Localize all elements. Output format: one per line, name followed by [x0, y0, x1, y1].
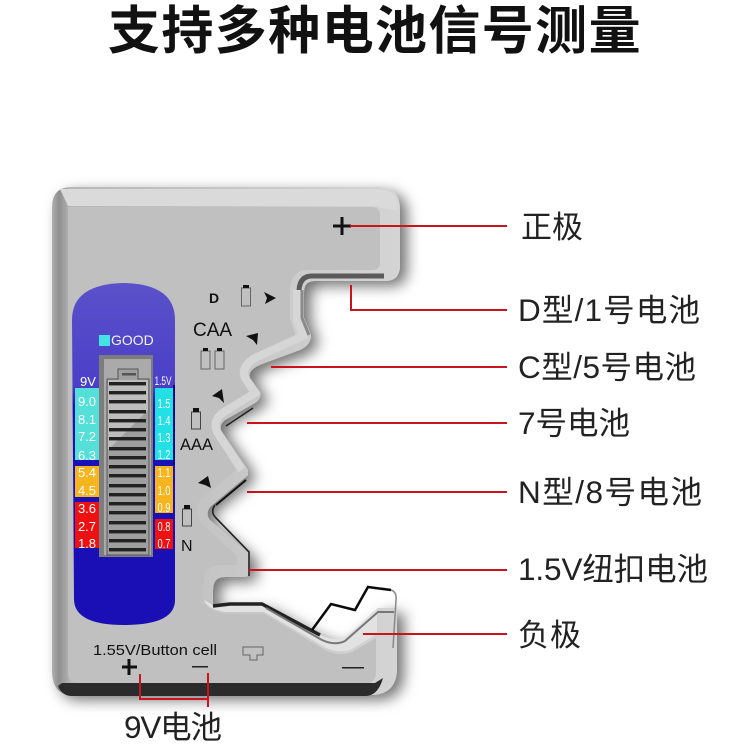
left 9V scale: 4.5: [78, 483, 96, 498]
button cell icon: [243, 647, 263, 660]
right 1.5V scale: 0.9: [158, 500, 170, 515]
bottom minus mark: [192, 666, 208, 668]
positive terminal mark: [333, 217, 351, 235]
display panel: [72, 283, 175, 625]
CAA slot marking: [193, 320, 258, 369]
label: N type: N型/8号电池: [518, 474, 702, 510]
left 9V scale: 9.0: [78, 394, 96, 409]
label: positive: 正极: [521, 210, 583, 245]
D slot marking: D: [209, 290, 219, 306]
callout bracket: 9V: [140, 673, 208, 707]
top bevel: [60, 189, 398, 210]
right 1.5V scale: 1.5: [158, 396, 170, 411]
title: 支持多种电池信号测量: [108, 3, 642, 61]
display background: [72, 283, 175, 625]
callout line: D type: [351, 285, 507, 310]
right 1.5V scale: 1.5V: [154, 374, 172, 388]
callout line: button cell: [248, 569, 507, 571]
left 9V scale: 5.4: [78, 465, 96, 480]
face plate: [68, 207, 380, 683]
right 1.5V scale: 1.1: [158, 465, 170, 480]
battery tester body: [52, 187, 400, 696]
left 9V scale: 3.6: [78, 501, 96, 516]
label: AAA: 7号电池: [518, 405, 630, 441]
bottom dark edge: [58, 678, 383, 696]
negative terminal mark: [342, 667, 364, 668]
battery gauge: [99, 355, 153, 557]
body silhouette: [52, 187, 400, 695]
right 1.5V scale: 0.7: [158, 536, 170, 551]
left 9V scale: 7.2: [78, 429, 96, 444]
right bevel highlight: [204, 600, 377, 651]
callout line: negative: [363, 633, 507, 635]
D slot marking: [209, 285, 276, 306]
right 1.5V scale: 1.0: [158, 483, 170, 498]
label: D type: D型/1号电池: [518, 292, 700, 328]
CAA slot marking: CAA: [193, 320, 232, 341]
right 1.5V scale: 0.8: [158, 519, 170, 534]
D notch bevel: [299, 276, 384, 290]
right 1.5V scale: 1.2: [158, 447, 170, 462]
metal contact spring: [213, 587, 396, 648]
callout line: AAA: [247, 422, 507, 424]
N slot marking: N: [181, 538, 193, 555]
callout line: positive: [350, 225, 507, 227]
right 1.5V scale: 1.3: [158, 430, 170, 445]
label: C type: C型/5号电池: [518, 349, 696, 385]
left 9V scale: 2.7: [78, 519, 96, 534]
label: button cell: 1.5V纽扣电池: [518, 551, 708, 587]
callout line: N type: [247, 491, 507, 493]
left 9V scale: [75, 374, 99, 551]
button cell label: 1.55V/Button cell: [93, 642, 217, 659]
AAA slot marking: [180, 389, 224, 454]
left 9V scale: 6.3: [78, 448, 96, 463]
bottom plus mark: [122, 659, 137, 675]
label: 9V: 9V电池: [124, 709, 222, 745]
N slot marking: [181, 476, 211, 555]
left 9V scale: 9V: [80, 374, 96, 389]
label: negative: 负极: [518, 618, 581, 653]
right 1.5V scale: 1.4: [158, 413, 170, 428]
right 1.5V scale: [154, 374, 175, 551]
good indicator: GOOD: [111, 332, 154, 348]
left 9V scale: 1.8: [78, 536, 96, 551]
left 9V scale: 8.1: [78, 412, 96, 427]
callout line: C type: [271, 366, 507, 368]
AAA slot marking: AAA: [180, 436, 213, 454]
